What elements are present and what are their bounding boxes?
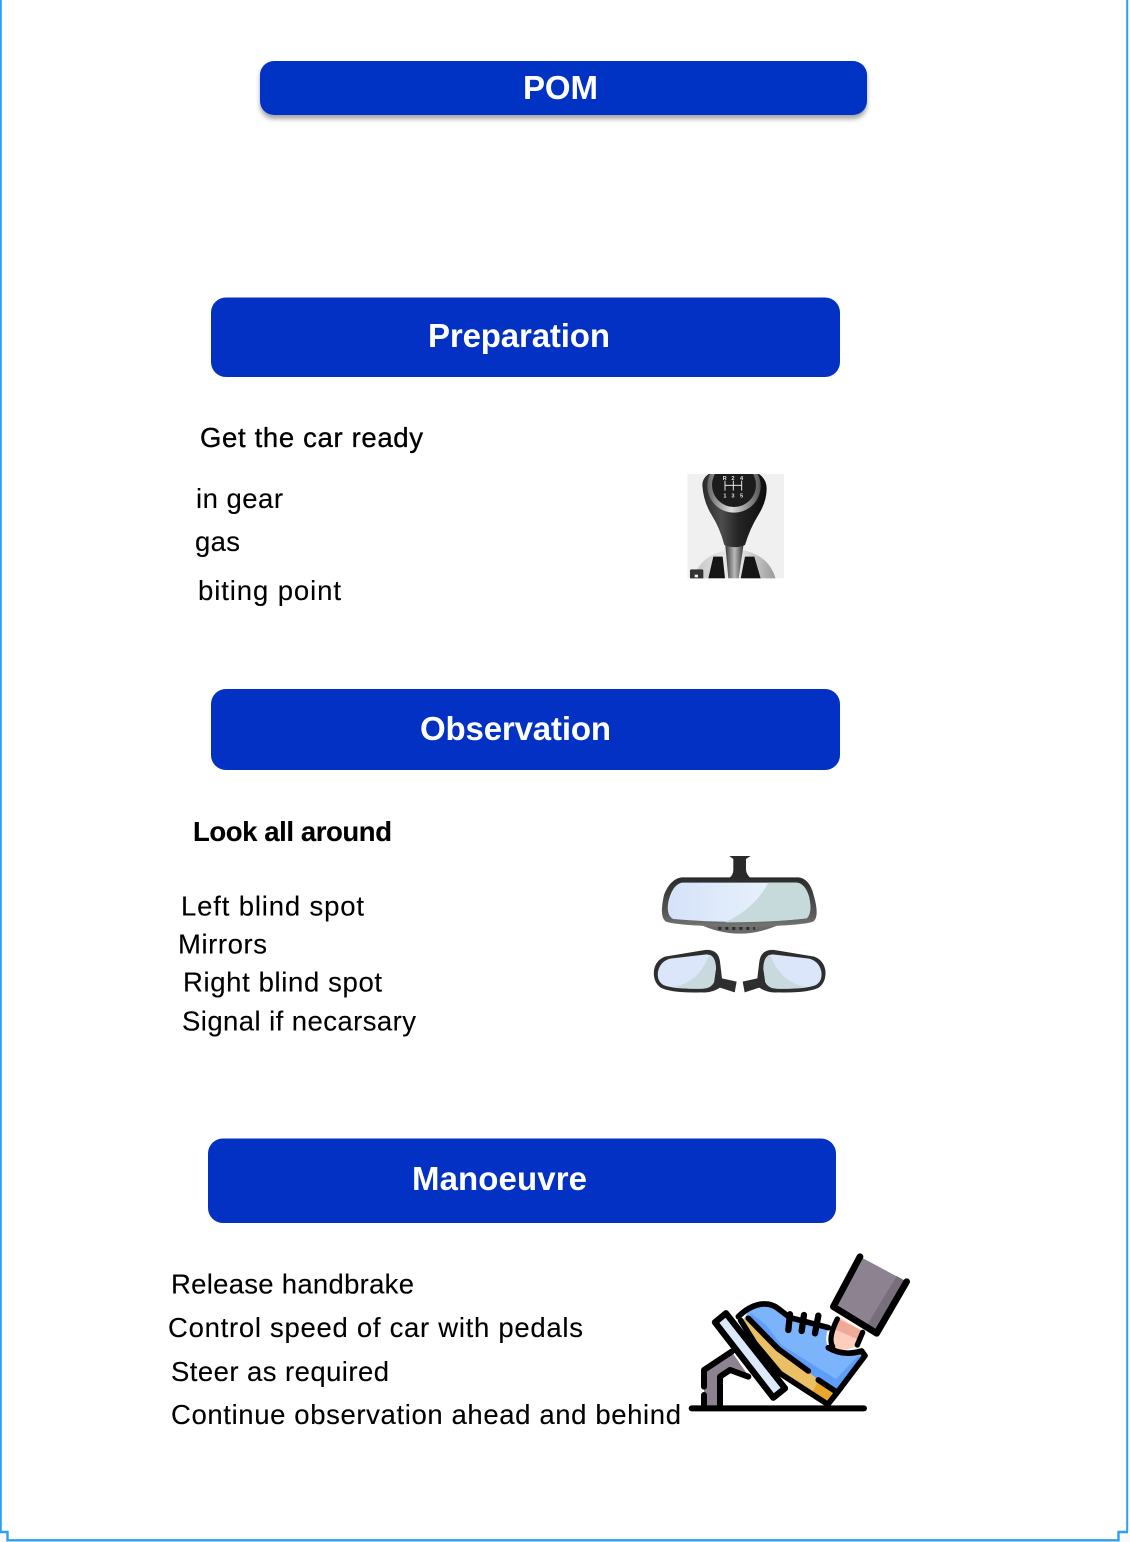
heading: Manoeuvre: Manoeuvre: [412, 1160, 587, 1197]
text: observation list: [178, 890, 416, 1036]
heading: Observation: Observation: [420, 710, 611, 747]
text: observation list: Mirrors: [178, 928, 267, 960]
icon: gear stick: 1: [723, 493, 726, 499]
text: manoeuvre list: Continue observation ahead and behind: [171, 1399, 681, 1430]
title: POM: [260, 61, 867, 115]
text: observation list: Left blind spot: [181, 890, 364, 922]
text: preparation list: in gear: [196, 483, 283, 514]
text: preparation list: [195, 483, 341, 606]
text: manoeuvre list: [168, 1268, 681, 1430]
icon: gear stick: 2: [731, 476, 734, 482]
text: get the car ready: Get the car ready: [200, 422, 423, 453]
icon: gear stick: 4: [740, 476, 744, 482]
text: preparation list: biting point: [198, 575, 341, 606]
title: POM: POM: [523, 69, 598, 106]
icon: car mirrors: [654, 856, 826, 992]
heading: Preparation: Preparation: [428, 317, 610, 354]
icon: gear stick: [688, 474, 784, 578]
icon: gear stick: 3: [731, 493, 734, 499]
text: manoeuvre list: Control speed of car with pedals: [168, 1312, 583, 1343]
heading: Preparation: [211, 298, 840, 377]
text: preparation list: gas: [195, 526, 240, 557]
heading: Observation: [211, 689, 840, 770]
icon: gear stick: 5: [740, 493, 743, 499]
text: manoeuvre list: Release handbrake: [171, 1268, 414, 1300]
icon: foot on pedal: [692, 1257, 907, 1408]
text: manoeuvre list: Steer as required: [171, 1356, 389, 1387]
icon: gear stick: R: [723, 476, 727, 482]
heading: Manoeuvre: [208, 1138, 836, 1223]
text: observation list: Signal if necarsary: [182, 1006, 416, 1036]
text: look all around: Look all around: [193, 816, 392, 847]
text: observation list: Right blind spot: [183, 966, 382, 998]
